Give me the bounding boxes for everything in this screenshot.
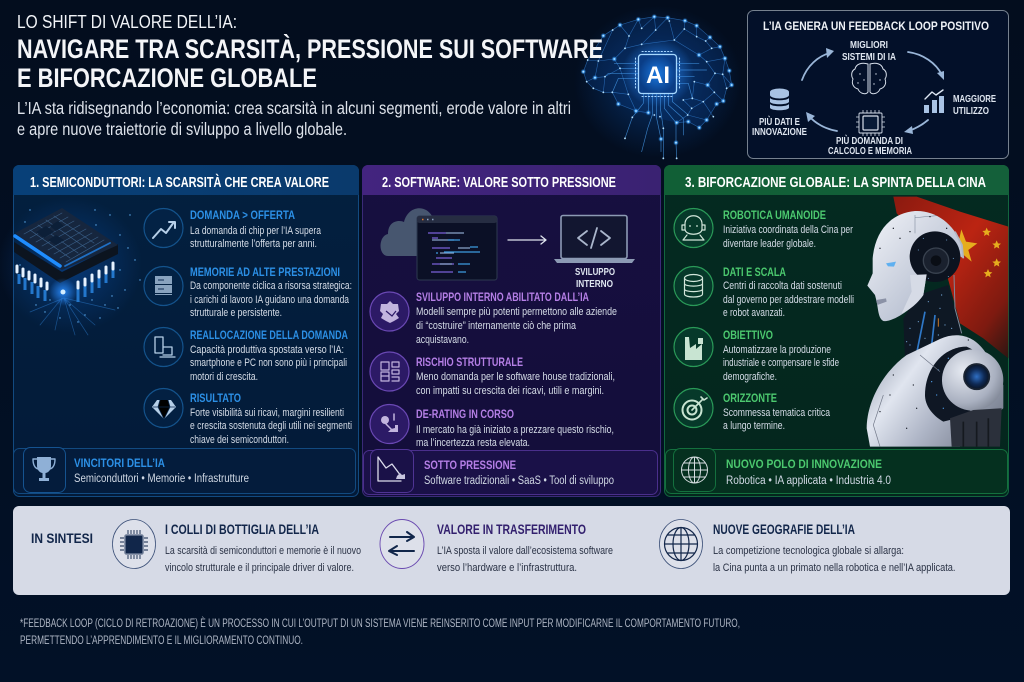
feedback step: migliori sistemi: SISTEMI DI IA	[842, 51, 896, 63]
summary: valore in trasferimento: VALORE IN TRASFERIMENTO	[437, 521, 586, 537]
callout: nuovo polo: NUOVO POLO DI INNOVAZIONE	[726, 459, 882, 471]
callout: sotto pressione: Software tradizionali • SaaS • Tool di sviluppo	[424, 475, 614, 487]
panel 1 header	[13, 165, 359, 195]
illustration: cloud and code window	[380, 208, 497, 280]
callout: sotto pressione	[364, 450, 658, 494]
panel: feedback loop: L’IA GENERA UN FEEDBACK LOOP POSITIVO	[763, 19, 989, 33]
item: domanda offerta: DOMANDA > OFFERTA	[190, 210, 295, 222]
summary: nuove geografie: la Cina punta a un primato nella robotica e nell’IA applicata.	[713, 562, 956, 574]
summary: valore in trasferimento: verso l’hardware e l’infrastruttura.	[437, 562, 577, 574]
item: risultato: Forte visibilità sui ricavi, margini resilienti	[190, 407, 344, 419]
item: robotica umanoide: Iniziativa coordinata della Cina per	[723, 224, 853, 236]
panel: semiconduttori	[0, 165, 359, 496]
panel: in sintesi	[13, 506, 1010, 595]
panel 1 header: 1. SEMICONDUTTORI: LA SCARSITÀ CHE CREA VALORE	[30, 174, 329, 191]
feedback step: domanda di calcolo: CALCOLO E MEMORIA	[828, 145, 912, 157]
item: sviluppo interno: di “costruire” internamente ciò che prima	[416, 320, 577, 332]
item: riallocazione: motori di crescita.	[190, 371, 258, 383]
subtitle: L’IA sta ridisegnando l’economia: crea scarsità in alcuni segmenti, erode valore in altri	[17, 98, 571, 118]
item: sviluppo interno: acquistavano.	[416, 334, 469, 346]
item: de-rating: ma l’incertezza resta elevata.	[416, 437, 530, 449]
item: memorie: strutturale e persistente.	[190, 307, 282, 319]
arrow: to in-house	[508, 236, 546, 244]
illustration: laptop: INTERNO	[576, 278, 613, 290]
item: memorie: MEMORIE AD ALTE PRESTAZIONI	[190, 267, 340, 279]
item: de-rating	[370, 404, 614, 449]
item: obiettivo	[674, 328, 839, 383]
item: dati e scala: Centri di raccolta dati sostenuti	[723, 280, 842, 292]
item: robotica umanoide: ROBOTICA UMANOIDE	[723, 210, 826, 222]
item: risultato: RISULTATO	[190, 393, 241, 405]
item: rischio strutturale: Meno domanda per le software house tradizionali,	[416, 371, 615, 383]
callout: vincitori: Semiconduttori • Memorie • Infrastrutture	[74, 473, 249, 485]
summary: valore in trasferimento	[380, 520, 613, 574]
title: main line 2: E BIFORCAZIONE GLOBALE	[17, 63, 317, 93]
feedback step: maggiore utilizzo: MAGGIORE	[953, 93, 996, 105]
item: orizzonte	[674, 388, 831, 432]
item: riallocazione: smartphone e PC non sono più i principali	[190, 357, 347, 369]
item: rischio strutturale: RISCHIO STRUTTURALE	[416, 357, 523, 369]
feedback step: migliori sistemi: MIGLIORI	[850, 39, 888, 51]
callout: vincitori	[14, 448, 356, 494]
footnote: *FEEDBACK LOOP (CICLO DI RETROAZIONE) È UN PROCESSO IN CUI L’OUTPUT DI UN SISTEMA VIENE REINSERITO COME INPUT PER MODIFICARNE IL COMPORTAMENTO FUTURO,	[20, 617, 740, 630]
summary: nuove geografie: NUOVE GEOGRAFIE DELL’IA	[713, 521, 855, 537]
item: rischio strutturale: con impatti su crescita dei ricavi, utili e margini.	[416, 385, 604, 397]
panel: feedback loop	[748, 10, 1008, 158]
illustration: laptop: SVILUPPO	[575, 266, 615, 278]
item: sviluppo interno: SVILUPPO INTERNO ABILITATO DALL’IA	[416, 292, 589, 304]
item: sviluppo interno	[370, 292, 617, 346]
panel 3 header	[664, 165, 1009, 195]
item: dati e scala: DATI E SCALA	[723, 267, 786, 279]
summary: nuove geografie: La competizione tecnologica globale si allarga:	[713, 545, 904, 557]
summary: valore in trasferimento: L’IA sposta il valore dall’ecosistema software	[437, 545, 613, 557]
summary: colli di bottiglia: La scarsità di semiconduttori e memorie è il nuovo	[165, 545, 361, 557]
subtitle	[17, 98, 571, 139]
panel: biforcazione globale	[664, 165, 1009, 496]
item: rischio strutturale	[370, 352, 615, 397]
item: de-rating: Il mercato ha già iniziato a prezzare questo rischio,	[416, 424, 614, 436]
summary: nuove geografie	[660, 520, 956, 574]
panel: software	[362, 165, 661, 496]
feedback step: domanda di calcolo: PIÙ DOMANDA DI	[836, 134, 903, 147]
illustration: AI brain: AI	[646, 62, 670, 89]
feedback step: più dati: PIÙ DATI E	[759, 115, 800, 128]
summary: colli di bottiglia: I COLLI DI BOTTIGLIA DELL’IA	[165, 521, 319, 537]
item: orizzonte: a lungo termine.	[723, 420, 785, 432]
item: de-rating: DE-RATING IN CORSO	[416, 409, 514, 421]
item: riallocazione	[144, 328, 348, 383]
head	[867, 211, 963, 321]
item: dati e scala: e robot avanzati.	[723, 307, 785, 319]
neck	[903, 285, 962, 358]
item: domanda offerta: La domanda di chip per l’IA supera	[190, 225, 322, 237]
item: orizzonte: ORIZZONTE	[723, 393, 777, 405]
item: robotica umanoide: diventare leader globale.	[723, 238, 816, 250]
item: obiettivo: industriale e compensare le sfide	[723, 357, 839, 369]
callout: nuovo polo: Robotica • IA applicata • Industria 4.0	[726, 475, 891, 487]
item: sviluppo interno: Modelli sempre più potenti permettono alle aziende	[416, 306, 617, 318]
flag	[893, 197, 1008, 358]
feedback step: più dati: INNOVAZIONE	[752, 126, 807, 138]
item: obiettivo: OBIETTIVO	[723, 330, 773, 342]
illustration: robot and flag	[867, 197, 1008, 447]
feedback step: maggiore utilizzo: UTILIZZO	[953, 105, 989, 117]
item: riallocazione: Capacità produttiva spostata verso l’IA:	[190, 344, 344, 356]
panel 2 header: 2. SOFTWARE: VALORE SOTTO PRESSIONE	[382, 175, 616, 191]
feedback step: domanda di calcolo	[828, 110, 912, 157]
summary: colli di bottiglia	[112, 520, 361, 574]
title: kicker: LO SHIFT DI VALORE DELL’IA:	[17, 12, 237, 32]
item: memorie: i carichi di lavoro IA guidano una domanda	[190, 294, 350, 306]
callout: nuovo polo	[666, 448, 1008, 494]
item: memorie	[144, 266, 352, 319]
footnote: PERMETTENDO L’APPRENDIMENTO E IL MIGLIORAMENTO CONTINUO.	[20, 635, 303, 647]
item: risultato	[144, 388, 352, 446]
item: robotica umanoide	[674, 208, 853, 250]
feedback step: migliori sistemi	[842, 39, 896, 94]
item: obiettivo: Automatizzare la produzione	[723, 344, 831, 356]
heading: in sintesi: IN SINTESI	[31, 530, 93, 546]
feedback step: maggiore utilizzo	[924, 90, 996, 117]
callout: sotto pressione: SOTTO PRESSIONE	[424, 460, 516, 472]
footnote	[20, 617, 740, 647]
panel 2 header	[362, 165, 661, 195]
torso	[867, 335, 1003, 447]
item: dati e scala	[674, 266, 854, 319]
illustration: chip	[0, 197, 142, 335]
illustration: laptop	[554, 216, 635, 290]
item: risultato: chiave dei semiconduttori.	[190, 434, 289, 446]
item: memorie: Da componente ciclica a risorsa strategica:	[190, 280, 352, 292]
item: dati e scala: dal governo per addestrare modelli	[723, 294, 854, 306]
summary: colli di bottiglia: vincolo strutturale e il principale driver di valore.	[165, 562, 354, 574]
item: riallocazione: REALLOCAZIONE DELLA DOMANDA	[190, 330, 348, 342]
subtitle: e apre nuove traiettorie di sviluppo a livello globale.	[17, 119, 347, 139]
feedback step: più dati	[752, 88, 807, 138]
item: risultato: e crescita sostenuta degli utili nei segmenti	[190, 420, 352, 432]
item: domanda offerta: strutturalmente l’offerta per anni.	[190, 238, 317, 250]
item: orizzonte: Scommessa tematica critica	[723, 407, 831, 419]
title: main line 1: NAVIGARE TRA SCARSITÀ, PRESSIONE SUI SOFTWARE	[17, 33, 603, 64]
item: obiettivo: demografiche.	[723, 371, 777, 383]
illustration: AI brain	[574, 6, 742, 158]
callout: vincitori: VINCITORI DELL’IA	[74, 458, 165, 470]
arrows: cycle	[802, 48, 944, 134]
title block	[17, 12, 603, 139]
item: domanda offerta	[144, 208, 322, 250]
